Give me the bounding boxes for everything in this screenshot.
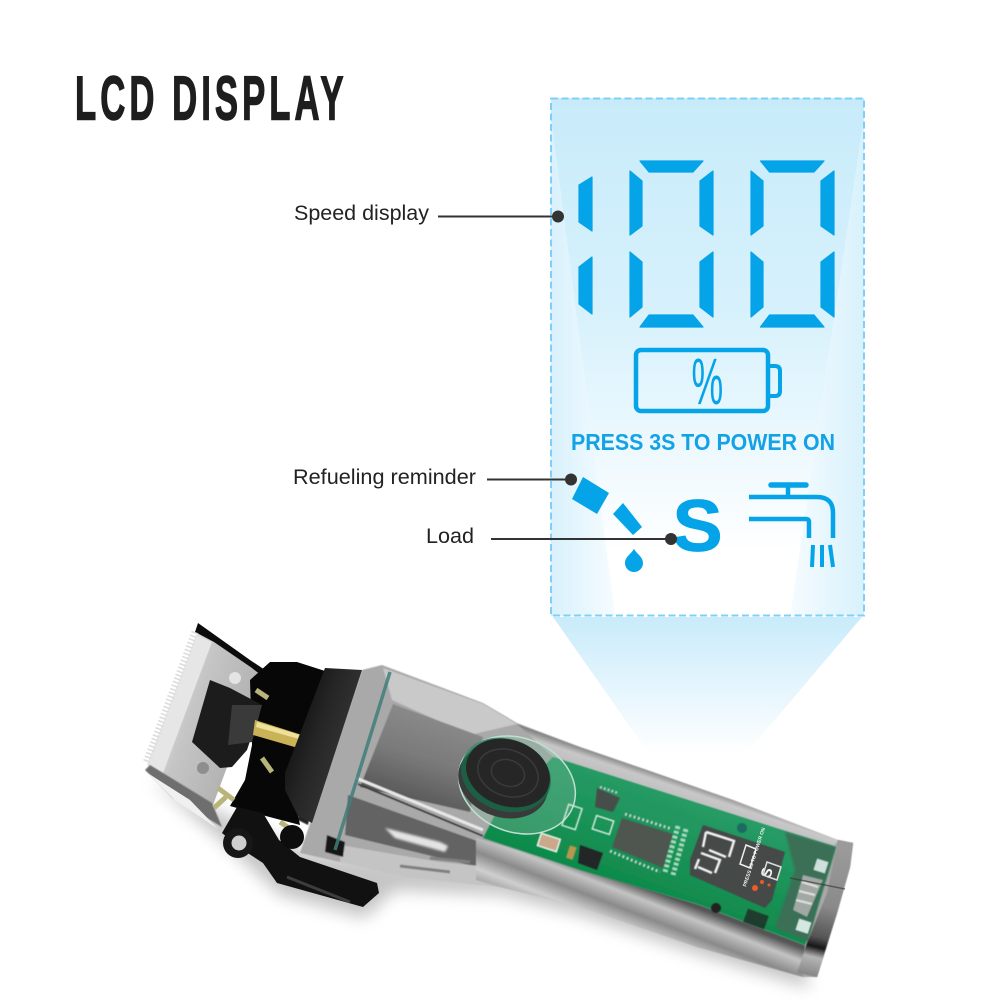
icon: battery percent: % (692, 346, 723, 419)
blade (145, 632, 263, 829)
clipper drop shadow (150, 780, 810, 988)
callout: load (426, 525, 677, 548)
callout: refueling reminder: Refueling reminder (293, 466, 476, 489)
blade back plate (195, 623, 268, 676)
miniature LCD display: S (758, 865, 777, 880)
board components (537, 787, 769, 929)
taper lever (222, 807, 379, 907)
miniature LCD display: PRESS 3S TO POWER ON (742, 827, 767, 888)
translucent button housing (444, 719, 590, 851)
panel: LCD enlarged view (551, 98, 864, 616)
speed digits 100 (579, 161, 834, 327)
icon: battery percent (636, 346, 780, 419)
clear body shell (298, 665, 853, 977)
callout: speed display (294, 202, 564, 225)
black ring collar (285, 668, 362, 823)
icon: oil bottle and drop (572, 477, 643, 572)
end cap (797, 840, 853, 977)
callout: load: Load (426, 525, 474, 548)
metal connector (793, 858, 829, 934)
projection beam (553, 617, 862, 755)
hair clipper product illustration (145, 623, 853, 988)
teal seam line (335, 672, 390, 850)
circuit board (483, 757, 836, 945)
callout: refueling reminder (293, 466, 577, 489)
icon: water tap (749, 485, 833, 567)
title: LCD DISPLAY (75, 64, 348, 133)
power on instruction: PRESS 3S TO POWER ON (571, 429, 835, 455)
motor head (192, 662, 325, 830)
miniature LCD display (690, 825, 785, 908)
power button (448, 725, 562, 831)
callout: speed display: Speed display (294, 202, 430, 225)
dark board end section (775, 832, 836, 942)
icon: load S: S (672, 485, 723, 567)
